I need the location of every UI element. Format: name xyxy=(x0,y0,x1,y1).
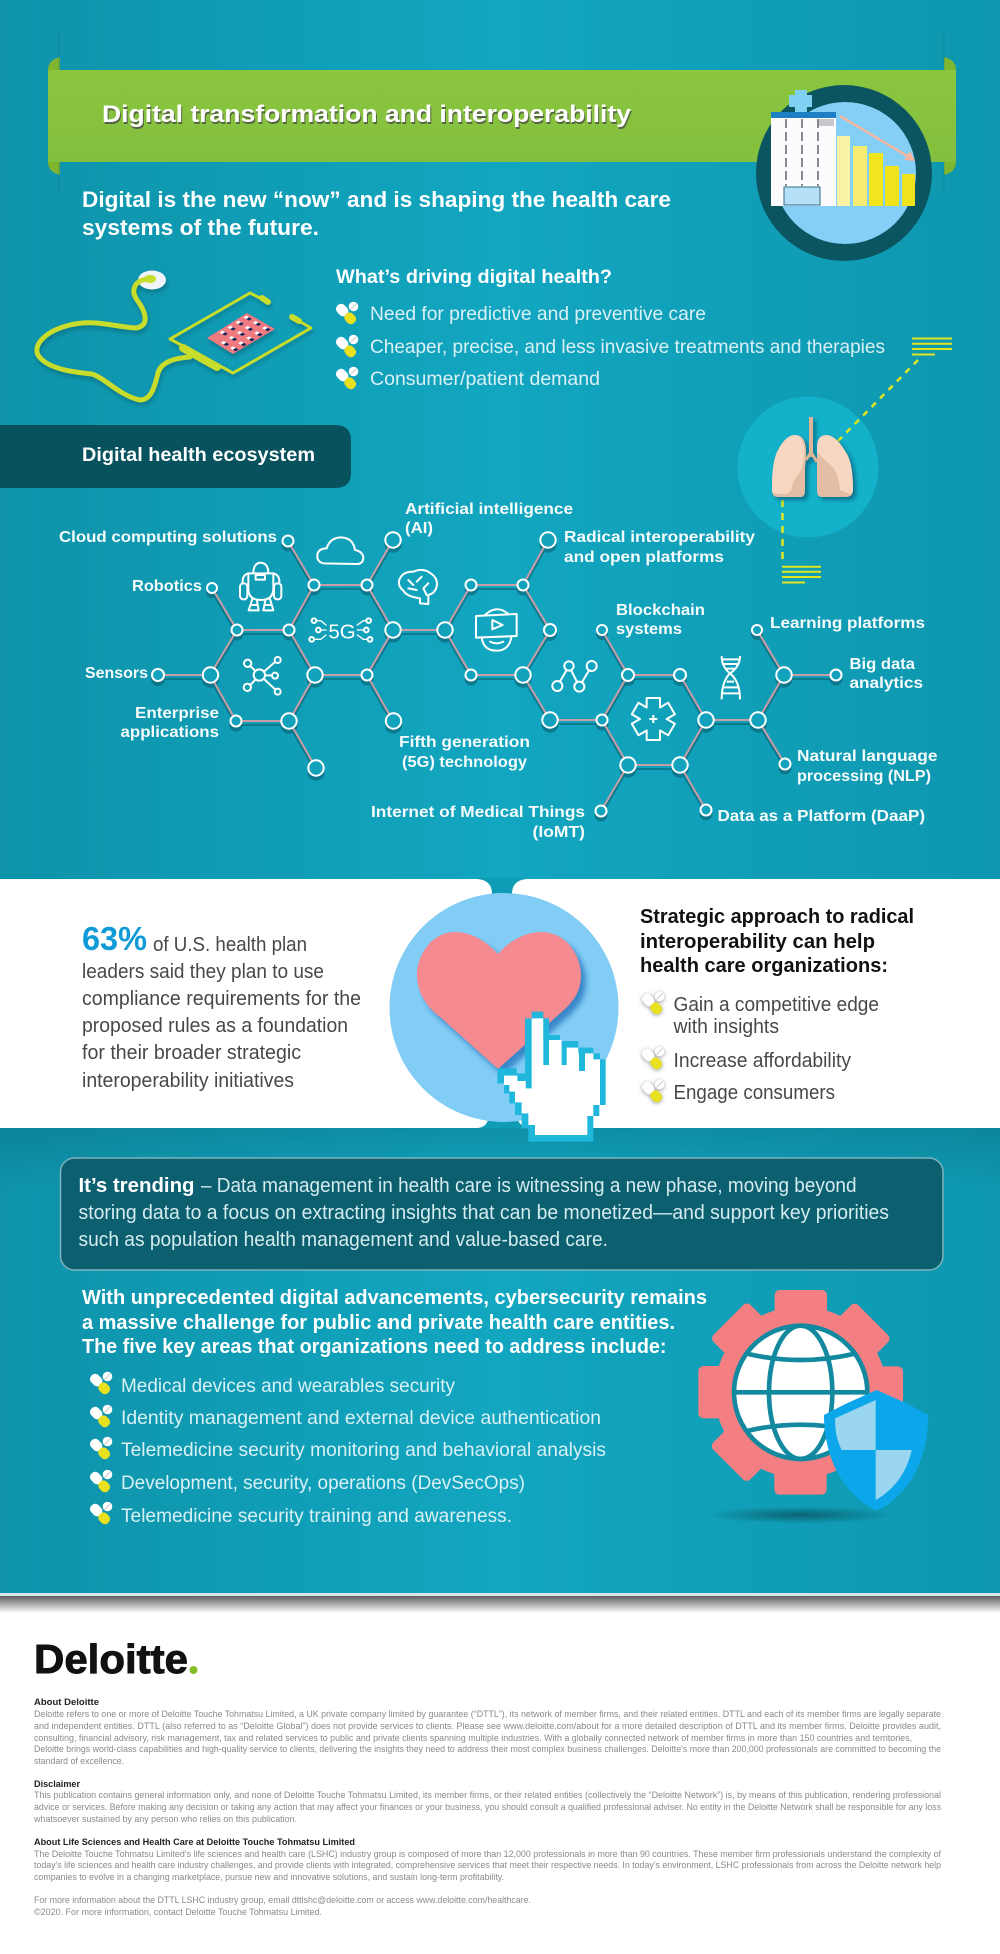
bullet list: Consumer/patient demand xyxy=(370,368,600,390)
band notch connectors xyxy=(477,878,532,1129)
ecosystem labels xyxy=(59,501,938,841)
icons: cloud, robot, brain, 5G, network, VR headset xyxy=(240,537,517,695)
text block: disclaimer: This publication contains general information only, and none of Deloitte Touche Tohmatsu Limited, its member firms, or their related entities (collectively the “Deloitte Network”) is, by means of this publication, rendering professional xyxy=(34,1789,941,1800)
panel: title ribbon xyxy=(48,30,956,192)
text block: 63% statistic: for their broader strategic xyxy=(82,1042,301,1064)
heading: digital health ecosystem: Digital health ecosystem xyxy=(82,444,315,466)
list: five key cybersecurity areas: Telemedicine security training and awareness. xyxy=(121,1505,512,1527)
text block: disclaimer: whatsoever sustained by any person who relies on this publication. xyxy=(33,1813,297,1824)
heading: What’s driving digital health? xyxy=(336,267,612,288)
ecosystem labels: systems xyxy=(616,621,682,638)
callout: it's trending: such as population health management and value-based care. xyxy=(78,1229,608,1251)
subheading: Digital is the new “now” and is shaping the health care xyxy=(82,187,671,212)
icon: 5G: 5G xyxy=(328,621,356,643)
ecosystem labels: Big data xyxy=(850,656,915,673)
ecosystem labels: processing (NLP) xyxy=(797,768,931,785)
icon: robot xyxy=(240,563,281,610)
text block: about Deloitte: consulting, financial advisory, risk management, tax and related services to public and private clients spanning multiple industries. With a globally connected network of member firms in more than 150 countries and territories, xyxy=(34,1732,912,1743)
ecosystem labels: Radical interoperability xyxy=(564,529,755,546)
text block: about Deloitte: and independent entities. DTTL (also referred to as “Deloitte Global”) does not provide services to clients. Please see www.deloitte.com/about for a more detailed description of DTTL and its member firms. Deloitte provides audit, xyxy=(34,1720,941,1731)
list: five key cybersecurity areas xyxy=(88,1372,606,1527)
text block: about Deloitte: Deloitte brings world-class capabilities and high-quality service to clients, delivering the insights they need to address their most complex business challenges. Deloitte’s more than 200,000 professionals are committed to becoming the xyxy=(34,1743,941,1754)
subheading xyxy=(82,187,671,240)
bullet list: Need for predictive and preventive care xyxy=(370,303,706,325)
ecosystem labels: (IoMT) xyxy=(532,824,585,841)
text block: disclaimer: Disclaimer xyxy=(34,1779,80,1790)
ecosystem labels: Enterprise xyxy=(135,705,219,722)
heading: health care organizations: xyxy=(640,955,888,977)
text block: about life sciences and health care: About Life Sciences and Health Care at Deloitte Touche Tohmatsu Limited xyxy=(34,1837,355,1848)
icon: gear with globe and shield xyxy=(698,1290,928,1524)
text block: 63% statistic: of U.S. health plan xyxy=(153,934,307,956)
panel: white statistics band xyxy=(0,879,1000,1128)
text block: contact and copyright xyxy=(34,1894,531,1917)
background: upper teal section xyxy=(0,0,1000,880)
title: Digital transformation and interoperability xyxy=(102,101,632,128)
text block: contact and copyright: ©2020. For more information, contact Deloitte Touche Tohmatsu Limited. xyxy=(34,1906,322,1917)
icon: 5G xyxy=(309,618,372,643)
bullet list: Gain a competitive edge xyxy=(674,994,879,1016)
list: five key cybersecurity areas: Development, security, operations (DevSecOps) xyxy=(121,1472,525,1494)
icon: cloud xyxy=(317,537,363,564)
text block: about Deloitte: standard of excellence. xyxy=(34,1755,124,1766)
ecosystem labels: Artificial intelligence xyxy=(405,501,573,518)
callout: it's trending: It’s trending xyxy=(78,1175,194,1197)
ecosystem labels: analytics xyxy=(850,675,923,692)
icons: trend line, star of life, DNA xyxy=(552,656,740,740)
ecosystem labels: Internet of Medical Things xyxy=(371,804,585,821)
icon: star of life xyxy=(632,698,675,740)
icon: stethoscope with tablet and pills xyxy=(37,270,311,400)
ecosystem labels: and open platforms xyxy=(564,549,724,566)
bullet list: Increase affordability xyxy=(674,1050,851,1072)
ecosystem labels: Robotics xyxy=(132,578,202,595)
text block: about life sciences and health care: today’s life sciences and health care industry challenges, and provide clients with integrated, comprehensive services that meet their respective needs. In today’s environment, LSHC professionals from across the Deloitte network help xyxy=(34,1859,941,1870)
text block: 63% statistic xyxy=(82,920,361,1092)
ecosystem labels: applications xyxy=(120,724,219,741)
text block: 63% statistic: interoperability initiatives xyxy=(82,1070,294,1092)
text block: about life sciences and health care: companies to evolve in a changing marketplace, pursue new and innovative solutions, and sustain long-term profitability. xyxy=(34,1871,504,1882)
list: five key cybersecurity areas: Identity management and external device authentication xyxy=(121,1407,601,1429)
text block: 63% statistic: compliance requirements for the xyxy=(82,988,361,1010)
text block: 63% statistic: leaders said they plan to use xyxy=(82,961,324,983)
bullet list: Engage consumers xyxy=(674,1082,835,1104)
callout: it's trending: storing data to a focus on extracting insights that can be monetized—and support key priorities xyxy=(78,1202,889,1224)
icon: hospital and falling bar chart xyxy=(756,85,932,261)
ecosystem labels: Cloud computing solutions xyxy=(59,529,277,546)
bullet list xyxy=(640,992,879,1104)
list: five key cybersecurity areas: Telemedicine security monitoring and behavioral analysis xyxy=(121,1439,606,1461)
text block: about Deloitte xyxy=(34,1697,941,1766)
text block: disclaimer xyxy=(33,1779,941,1824)
icon: VR headset xyxy=(476,609,517,651)
icon: trend line xyxy=(552,661,597,692)
band shadow xyxy=(0,1593,1000,1613)
background: lower teal section xyxy=(0,1128,1000,1594)
ecosystem labels: (AI) xyxy=(405,520,433,537)
text block: strategic approach xyxy=(640,906,914,1104)
heading: Strategic approach to radical xyxy=(640,906,914,928)
text block: about Deloitte: About Deloitte xyxy=(34,1697,99,1708)
heading: interoperability can help xyxy=(640,931,875,953)
subheading: systems of the future. xyxy=(82,215,319,240)
text block: cybersecurity intro xyxy=(82,1287,707,1358)
icon: DNA xyxy=(722,656,740,699)
text block: cybersecurity intro: a massive challenge for public and private health care entities. xyxy=(82,1312,675,1334)
callout: it's trending xyxy=(60,1158,943,1270)
logo: Deloitte: Deloitte xyxy=(34,1636,188,1682)
icon: lungs with dashed callouts xyxy=(738,338,952,582)
list: five key cybersecurity areas: Medical devices and wearables security xyxy=(121,1375,455,1397)
ecosystem labels: Sensors xyxy=(85,665,148,682)
icon: brain xyxy=(399,570,437,604)
heading: digital health ecosystem xyxy=(0,425,351,488)
hexagon network diagram xyxy=(152,532,842,816)
bullet list xyxy=(334,302,885,391)
text block: cybersecurity intro: With unprecedented digital advancements, cybersecurity remains xyxy=(82,1287,707,1309)
ecosystem labels: Natural language xyxy=(797,748,938,765)
ecosystem labels: (5G) technology xyxy=(402,754,527,771)
callout: it's trending: – Data management in health care is witnessing a new phase, moving beyond xyxy=(201,1175,856,1197)
icon: heart with pixel hand cursor xyxy=(390,893,618,1142)
panel: what's driving digital health xyxy=(334,267,885,391)
text block: about life sciences and health care xyxy=(34,1837,941,1882)
bullet list: with insights xyxy=(673,1016,779,1038)
ecosystem labels: Learning platforms xyxy=(770,615,925,632)
text block: disclaimer: advice or services. Before making any decision or taking any action that may affect your finances or your business, you should consult a qualified professional adviser. No entity in the Deloitte Network shall be responsible for any loss xyxy=(34,1801,941,1812)
text block: 63% statistic: proposed rules as a foundation xyxy=(82,1015,348,1037)
icon: network xyxy=(244,657,281,695)
heading xyxy=(640,906,914,977)
text block: cybersecurity intro: The five key areas that organizations need to address include: xyxy=(82,1336,666,1358)
text block: about Deloitte: Deloitte refers to one or more of Deloitte Touche Tohmatsu Limited, a UK private company limited by guarantee (“DTTL”), its network of member firms, and their related entities. DTTL and each of its member firms are legally separate xyxy=(34,1708,941,1719)
text block: 63% statistic: 63% xyxy=(82,920,147,957)
ecosystem labels: Blockchain xyxy=(616,602,705,619)
text block: about life sciences and health care: The Deloitte Touche Tohmatsu Limited’s life sciences and health care (LSHC) industry group is composed of more than 12,000 professionals in more than 90 countries. These member firm professionals understand the complexity of xyxy=(34,1848,941,1859)
ecosystem labels: Data as a Platform (DaaP) xyxy=(718,808,925,825)
text block: contact and copyright: For more information about the DTTL LSHC industry group, email dttlshc@deloitte.com or access www.deloitte.com/healthcare. xyxy=(34,1894,531,1905)
bullet list: Cheaper, precise, and less invasive treatments and therapies xyxy=(370,336,885,358)
ecosystem labels: Fifth generation xyxy=(399,734,530,751)
